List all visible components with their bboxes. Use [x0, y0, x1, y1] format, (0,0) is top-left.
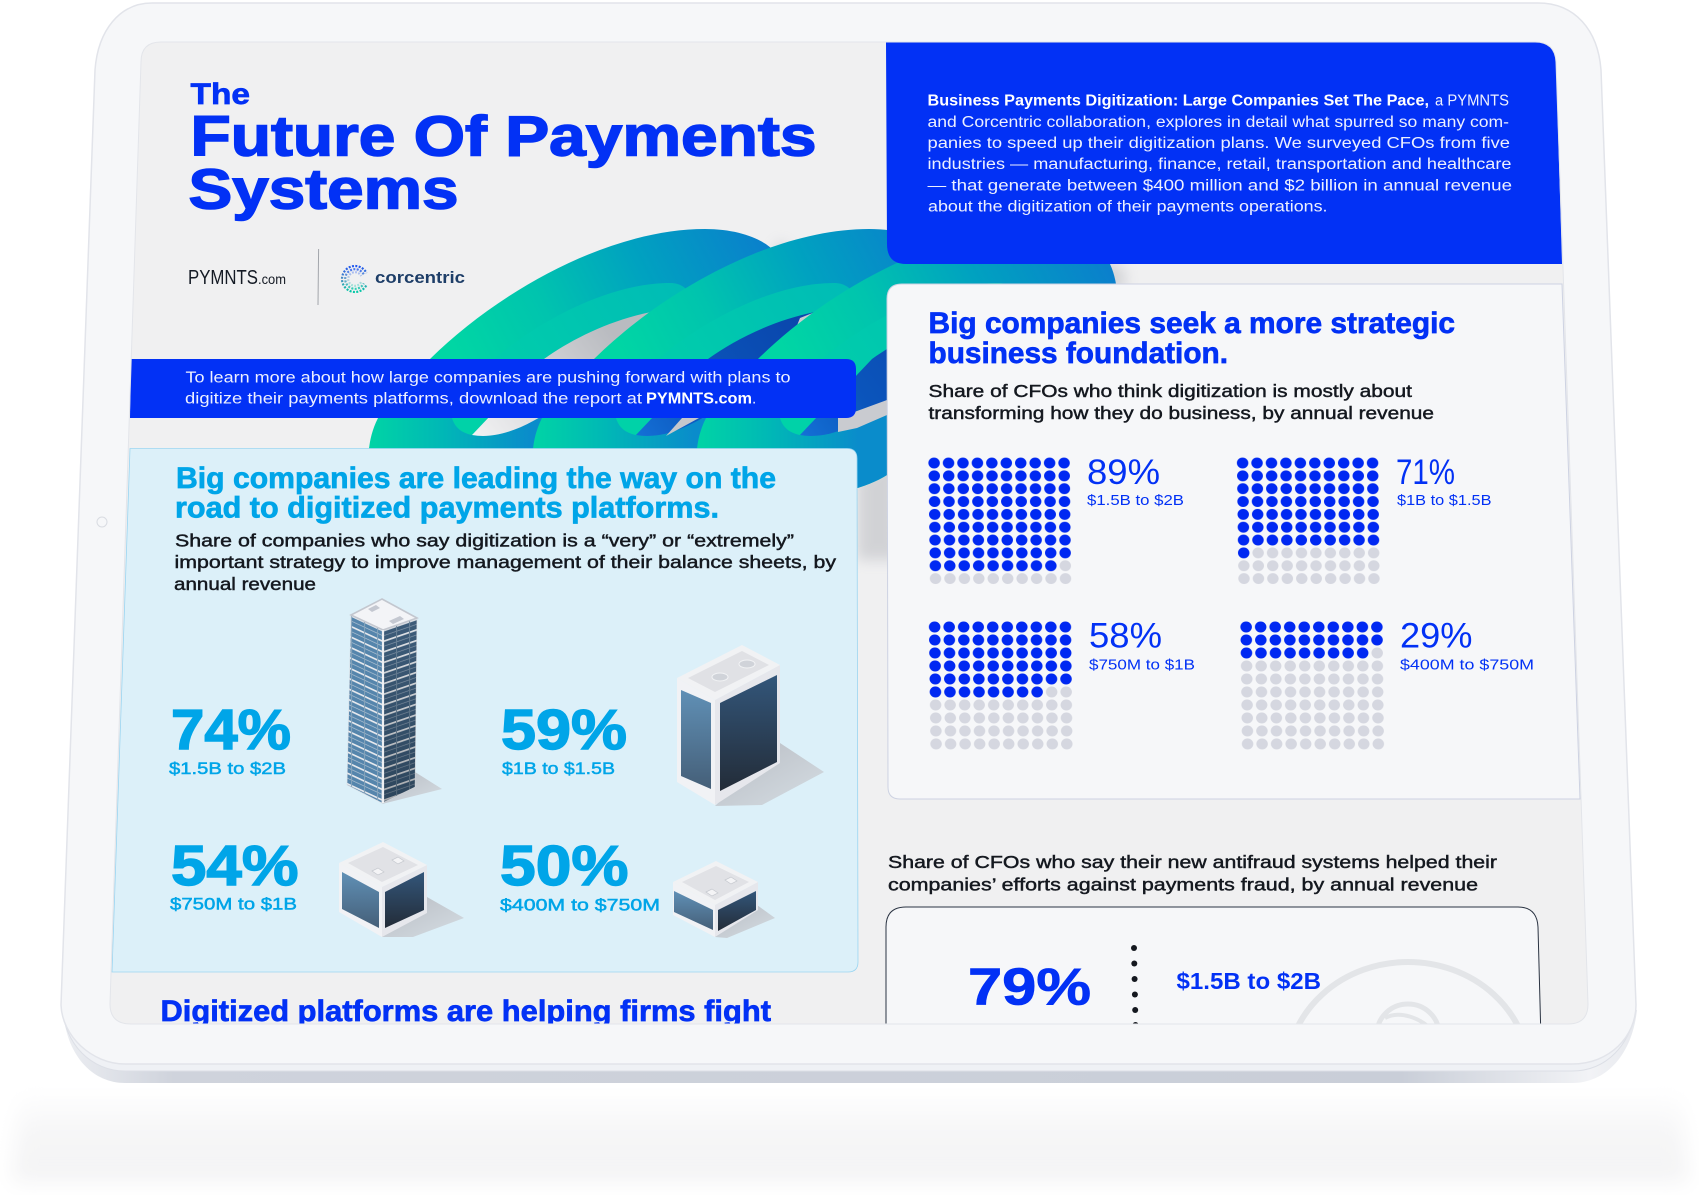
- stat: 74%: $1.5B to $2B: [169, 759, 286, 778]
- stat: 89%: [1087, 459, 1183, 506]
- stat: 50%: [500, 844, 659, 912]
- icon: small low building: [673, 861, 775, 938]
- logo: corcentric: corcentric: [375, 268, 465, 287]
- dotted divider: [1131, 945, 1138, 1028]
- screen background: [100, 40, 1600, 1030]
- icon: mid-rise building: [677, 645, 824, 806]
- intro text: [928, 93, 1512, 216]
- antifraud subheading: [888, 852, 1497, 894]
- stat: 89%: 89%: [1087, 453, 1160, 492]
- dot chart: 89%: [927, 457, 1073, 585]
- stat: 74%: [168, 709, 290, 776]
- stat: 59%: [502, 708, 626, 776]
- intro text: — that generate between $400 million and $2 billion in annual revenue: [928, 178, 1512, 194]
- section heading: digitized platforms: Digitized platforms are helping firms fight: [160, 995, 771, 1028]
- tablet base edge: [63, 1010, 1637, 1083]
- decorative 3D rings: [369, 229, 1125, 560]
- ring shadow: [770, 240, 1125, 560]
- revenue label: $1.5B to $2B: [1176, 968, 1321, 994]
- title: The: [190, 78, 250, 111]
- ring two: [533, 229, 898, 448]
- ring three: [697, 262, 1116, 488]
- stat: 71%: [1397, 459, 1491, 506]
- logo: PYMNTS.com: .com: [258, 271, 286, 287]
- stat: 29%: [1400, 622, 1533, 671]
- call-to-action text: To learn more about how large companies are pushing forward with plans to: [186, 370, 790, 386]
- panel: antifraud results: [886, 907, 1541, 1182]
- stat: 58%: 58%: [1089, 616, 1162, 656]
- stat: 74%: 74%: [171, 698, 291, 762]
- panel heading: Big companies seek a more strategic: [928, 307, 1455, 340]
- call-to-action text: digitize their payments platforms, download the report at: [185, 390, 643, 408]
- intro text: and Corcentric collaboration, explores in detail what spurred so many com-: [928, 114, 1509, 131]
- logo: PYMNTS.com: [189, 270, 286, 284]
- icon: low building: [339, 842, 464, 937]
- stat: 54%: [170, 845, 298, 912]
- panel heading: [930, 311, 1454, 364]
- ring one: [369, 229, 770, 448]
- icon: tower building: [347, 599, 442, 804]
- tablet screen: [112, 42, 1580, 1024]
- panel heading: [175, 462, 776, 524]
- call-to-action text: .: [752, 390, 756, 408]
- stat: 71%: 71%: [1396, 453, 1455, 492]
- stat: 59%: 59%: [501, 698, 627, 762]
- intro text: about the digitization of their payments operations.: [928, 199, 1328, 216]
- panel subheading: annual revenue: [174, 574, 316, 594]
- stat: 58%: [1089, 622, 1194, 671]
- logo: PYMNTS.com: PYMNTS: [188, 267, 258, 289]
- stat: 29%: 29%: [1400, 616, 1472, 656]
- panel subheading: Share of companies who say digitization is a “very” or “extremely”: [175, 530, 794, 550]
- stat: 50%: 50%: [500, 834, 628, 898]
- stat: 59%: $1B to $1.5B: [502, 759, 615, 778]
- panel subheading: important strategy to improve management of their balance sheets, by: [174, 552, 836, 572]
- panel heading: Big companies are leading the way on the: [176, 462, 776, 495]
- stat: 89%: $1.5B to $2B: [1087, 493, 1184, 509]
- logo divider: [318, 249, 320, 305]
- panel subheading: transforming how they do business, by annual revenue: [928, 403, 1434, 423]
- intro text: industries — manufacturing, finance, retail, transportation and healthcare: [928, 156, 1512, 173]
- screen outline: [110, 42, 1588, 1024]
- panel subheading: Share of CFOs who think digitization is mostly about: [928, 381, 1412, 401]
- dot chart: 71%: [1235, 457, 1381, 585]
- title: [188, 78, 816, 222]
- panel: strategic business foundation: [887, 284, 1580, 799]
- title: Future Of Payments: [190, 104, 816, 168]
- panel heading: road to digitized payments platforms.: [175, 492, 719, 524]
- call-to-action bar: [130, 359, 856, 418]
- intro text: Business Payments Digitization: Large Companies Set The Pace,: [928, 93, 1429, 110]
- icon: fingerprint circle line art: [1287, 962, 1529, 1182]
- stat: 79%: 79%: [968, 958, 1091, 1016]
- dot chart: 29%: [1239, 620, 1386, 750]
- panel: big companies leading: [112, 448, 858, 972]
- tablet rim: [62, 1005, 1636, 1071]
- tablet camera button: [97, 517, 107, 527]
- intro text: a PYMNTS: [1435, 93, 1509, 110]
- stat: 50%: $400M to $750M: [500, 896, 660, 914]
- stat: 58%: $750M to $1B: [1089, 658, 1195, 674]
- panel: report intro: [886, 42, 1562, 264]
- floor shadow: [12, 1090, 1688, 1182]
- panel heading: business foundation.: [928, 337, 1228, 370]
- panel subheading: [174, 530, 836, 594]
- stat: 71%: $1B to $1.5B: [1397, 493, 1492, 509]
- corcentric icon: [342, 266, 368, 292]
- stat: 54%: $750M to $1B: [170, 894, 297, 914]
- antifraud subheading: companies’ efforts against payments fraud, by annual revenue: [888, 874, 1478, 894]
- dot chart: 58%: [927, 620, 1074, 750]
- logo: corcentric: [342, 266, 465, 292]
- call-to-action text: [185, 370, 790, 408]
- panel subheading: [928, 381, 1434, 423]
- intro text: panies to speed up their digitization plans. We surveyed CFOs from five: [928, 135, 1510, 152]
- title: Systems: [188, 158, 458, 222]
- antifraud subheading: Share of CFOs who say their new antifraud systems helped their: [888, 852, 1497, 872]
- call-to-action text: PYMNTS.com: [646, 390, 752, 408]
- stat: 54%: 54%: [171, 834, 298, 898]
- stat: 29%: $400M to $750M: [1400, 658, 1534, 674]
